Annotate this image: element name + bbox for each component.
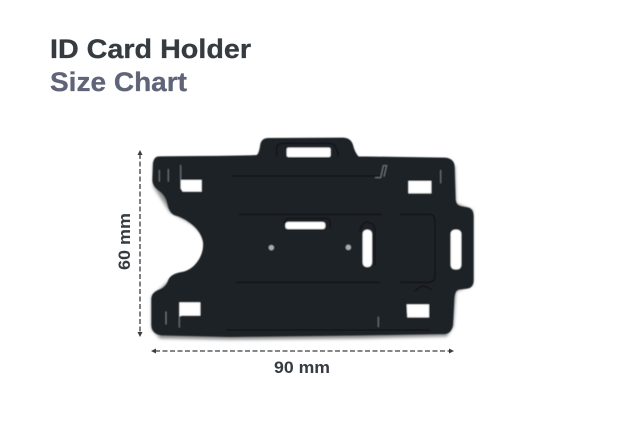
title: [50, 34, 252, 97]
top-right window: [408, 181, 431, 193]
arrow: height dimension: [138, 150, 142, 337]
bottom-left window: [179, 302, 200, 317]
heading: ID Card Holder: ID Card Holder: [50, 34, 252, 64]
centre horizontal slot: [285, 222, 325, 229]
holder body: [152, 139, 473, 336]
label: 90 mm: 90 mm: [274, 358, 330, 377]
holder shadow: [152, 142, 473, 340]
top-left window: [181, 180, 202, 192]
moulded detail lines: [227, 143, 435, 330]
arrow: width dimension: [151, 348, 454, 354]
top strap slot: [287, 148, 331, 157]
right vertical slot: [451, 230, 461, 269]
centre vertical slot: [363, 230, 372, 267]
small highlights: [159, 165, 441, 328]
bottom-right window: [407, 304, 429, 317]
slots and cut-outs: [179, 148, 461, 317]
subheading: Size Chart: Size Chart: [50, 67, 187, 97]
right pin hole: [346, 245, 351, 250]
icon: ID card holder: [152, 139, 473, 340]
label: 60 mm: 60 mm: [115, 213, 134, 270]
left pin hole: [269, 245, 274, 250]
